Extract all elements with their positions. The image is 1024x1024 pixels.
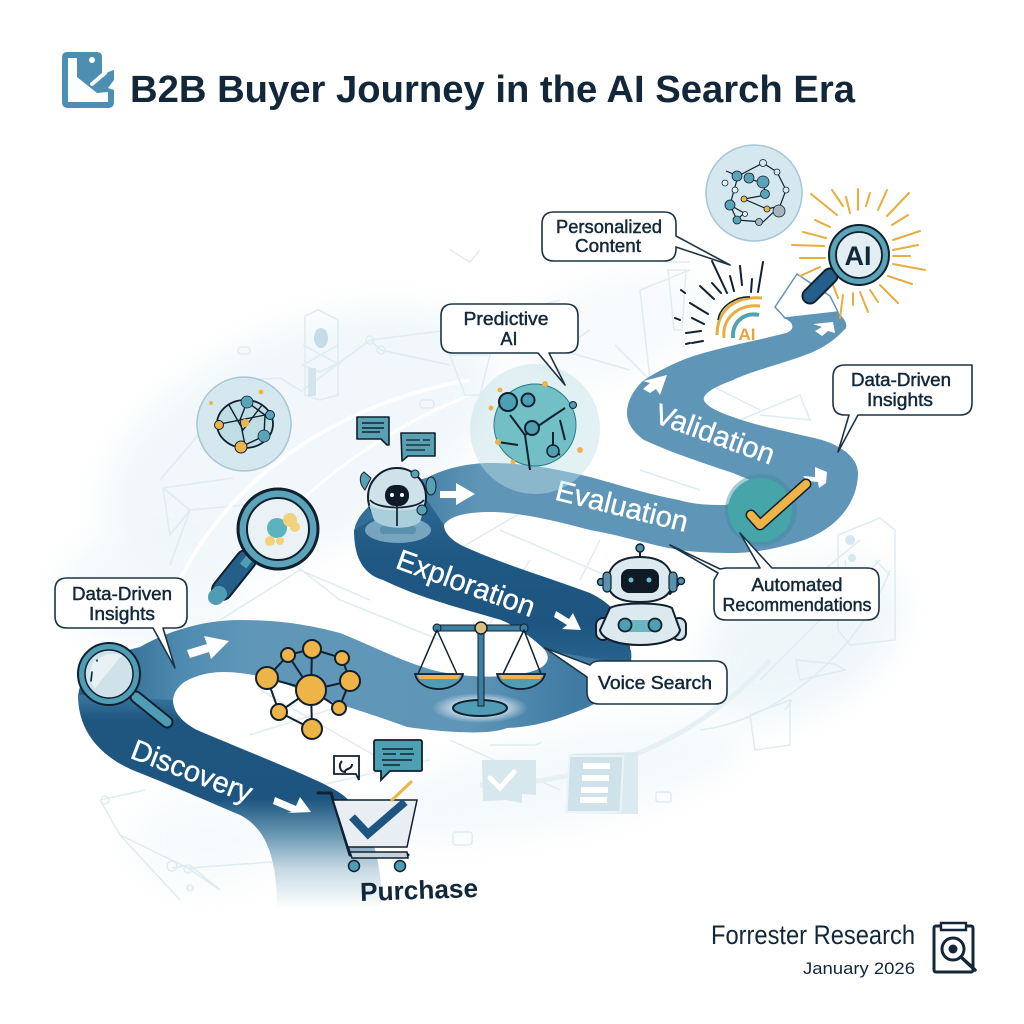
- icon: AI rainbow arcs with rays: [675, 261, 763, 344]
- background icon: small card and box: [238, 347, 845, 845]
- credit: Forrester Research: Forrester Research: [711, 920, 915, 950]
- road: exploration: [354, 490, 631, 665]
- arrow: discovery upper: [187, 636, 229, 659]
- callout: Predictive AI: AI: [500, 329, 518, 349]
- title: B2B Buyer Journey in the AI Search Era: [130, 69, 856, 111]
- icon: magnifier discovery: [78, 643, 167, 722]
- icon: teal chat bubble: [374, 740, 422, 780]
- road label: Exploration: Exploration: [392, 544, 539, 624]
- arrow: discovery lower: [273, 797, 311, 813]
- callout: Personalized Content: [542, 212, 730, 265]
- callout: Voice Search: Voice Search: [598, 673, 712, 693]
- icon: network sphere left: [197, 377, 291, 471]
- road label: Validation: Validation: [650, 398, 779, 471]
- icon: AI magnifier with rays: AI: [844, 241, 872, 271]
- callout: Automated Recommendations: Recommendations: [722, 595, 872, 615]
- road: discovery: [78, 695, 382, 908]
- callout: Voice Search: [545, 648, 727, 704]
- icon: chat bubble right: [401, 433, 435, 461]
- background icon: server blocks right: [838, 518, 895, 645]
- icon: network nodes: [256, 640, 360, 739]
- arrow: near check: [803, 467, 827, 488]
- icon: AI rainbow arcs with rays: AI: [738, 325, 756, 344]
- callout: Data-Driven Insights left: Data-Driven: [72, 584, 172, 604]
- arrow: exploration: [554, 611, 581, 630]
- callout: Predictive AI: [441, 304, 578, 385]
- callout: Data-Driven Insights left: [55, 578, 187, 668]
- callout: Data-Driven Insights right: Data-Driven: [851, 370, 951, 390]
- road: evaluation and validation: [354, 310, 858, 553]
- background icon: person box: [303, 310, 340, 400]
- callout: Data-Driven Insights right: Insights: [867, 390, 933, 410]
- callout: Data-Driven Insights right: [833, 365, 972, 452]
- icon: chat bubble left: [357, 417, 389, 445]
- icon: clipboard search: [934, 923, 975, 972]
- callout: Automated Recommendations: Automated: [752, 575, 842, 595]
- icon: predictive AI globe: [470, 364, 600, 494]
- background icon: test tube: [450, 250, 690, 395]
- icon: check badge: [725, 474, 806, 546]
- arrow: evaluation: [440, 483, 475, 505]
- icon: robot large: [596, 544, 686, 645]
- icon: balance scale: [415, 622, 545, 723]
- arrow: validation upper: [813, 322, 835, 336]
- title icon: [62, 52, 114, 108]
- road label: Evaluation: Evaluation: [552, 475, 691, 539]
- icon: large magnifier: [216, 489, 318, 597]
- icon: AI magnifier with rays: [792, 189, 925, 318]
- road: upper discovery band: [78, 620, 631, 732]
- road label: Purchase: Purchase: [360, 873, 478, 907]
- background icon: document: [565, 752, 638, 814]
- callout: Data-Driven Insights left: Insights: [89, 604, 155, 624]
- icon: white notch at road end: [775, 274, 838, 318]
- callout: Predictive AI: Predictive: [464, 309, 548, 329]
- credit: date: January 2026: [803, 959, 915, 978]
- icon: small chat bubble: [334, 756, 359, 780]
- icon: robot on road: [360, 468, 436, 543]
- callout: Personalized Content: Content: [575, 236, 641, 256]
- background icon: check tile: [482, 760, 536, 803]
- icon: network sphere top: [706, 145, 802, 241]
- callout: Personalized Content: Personalized: [556, 217, 662, 237]
- road label: Discovery: Discovery: [126, 734, 257, 810]
- arrow: validation lower: [643, 375, 667, 395]
- icon: shopping cart: [318, 782, 417, 872]
- callout: Automated Recommendations: [670, 533, 879, 620]
- background wash: [60, 249, 930, 890]
- background network lines: [100, 270, 890, 900]
